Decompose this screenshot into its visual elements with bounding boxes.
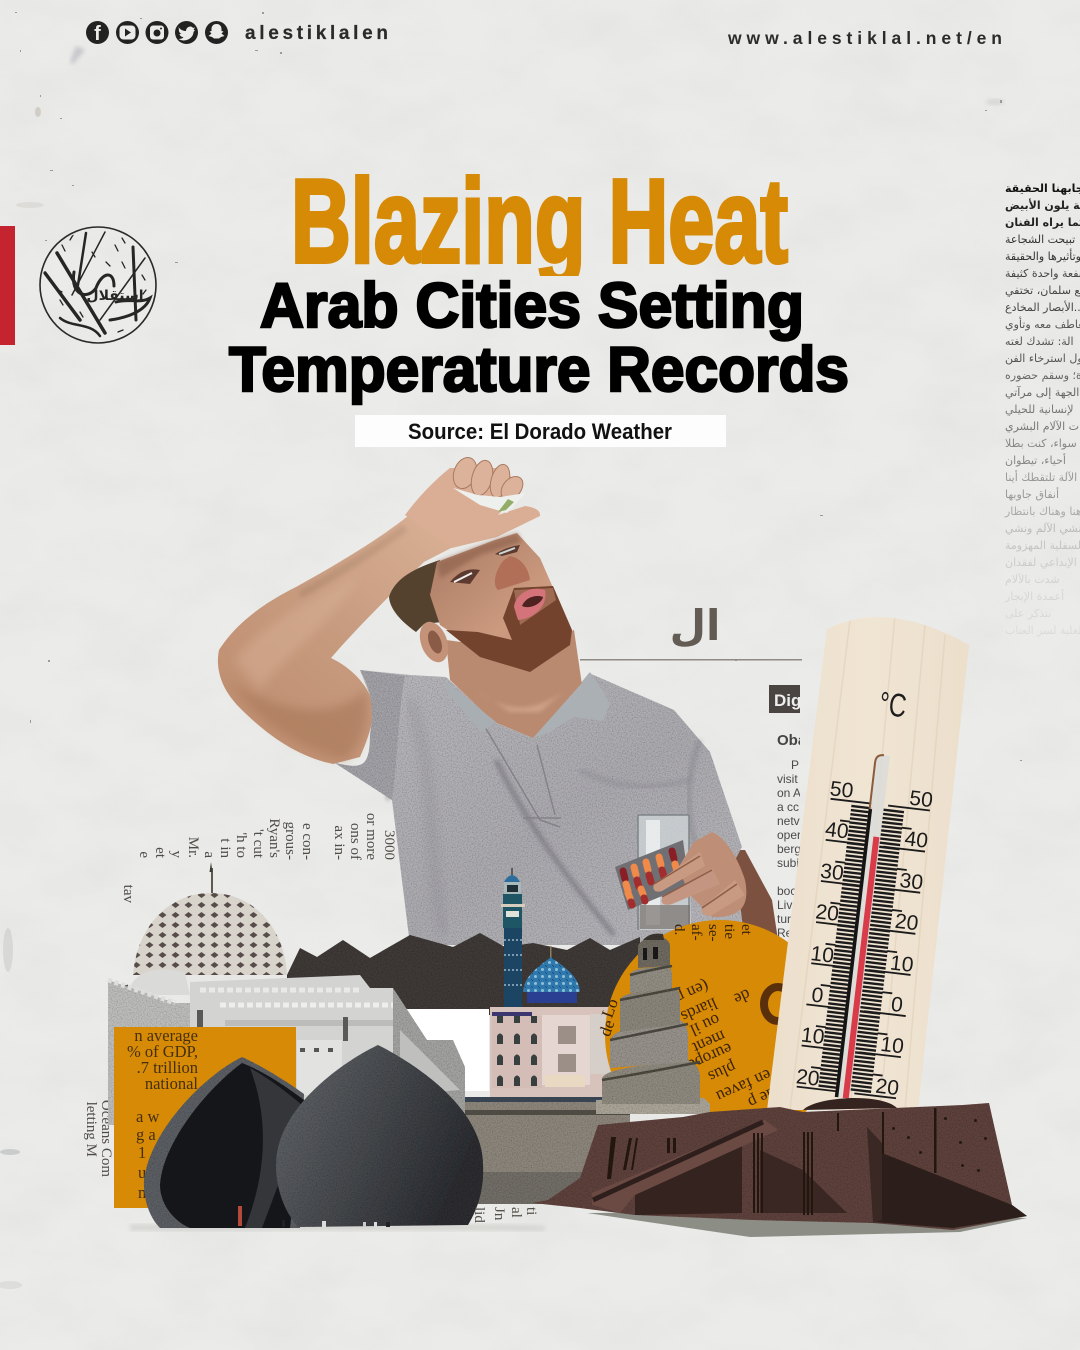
newsprint under monument — [471, 1207, 539, 1223]
orange circle with mirrored text: et — [738, 924, 754, 936]
cheek, nose — [495, 556, 530, 590]
heading: Arab Cities Setting: Arab Cities Setting — [260, 271, 804, 341]
newsprint under monument: al — [508, 1207, 524, 1218]
rotated newspaper text: or more — [363, 813, 379, 860]
newspaper clipping behind man and thermometer: Oba — [777, 732, 807, 749]
red accent bar — [0, 226, 15, 345]
orange clipping: % of GDP, — [127, 1042, 198, 1061]
hair — [389, 560, 442, 632]
title block — [229, 155, 849, 405]
icon: facebook: f — [94, 23, 101, 45]
right dome — [276, 1045, 483, 1227]
Malwiya spiral minaret — [596, 934, 710, 1114]
pill blister pack — [615, 840, 689, 910]
lattice dome — [133, 893, 287, 975]
heading: Temperature Records: Temperature Records — [229, 335, 849, 405]
rotated newspaper text: 'h to — [233, 832, 249, 858]
orange clipping: n average — [134, 1026, 198, 1045]
newspaper clipping behind man and thermometer: tur — [777, 912, 791, 926]
orange circle with mirrored text: af- — [688, 924, 704, 941]
skyline: white cut-out — [407, 1009, 489, 1091]
Arabic newspaper column: تبيحت الشجاعة — [1005, 233, 1075, 246]
ten-degree rules — [817, 800, 852, 1095]
newspaper clipping behind man and thermometer: subi — [777, 856, 799, 870]
skyline: blue-tiled minaret — [501, 868, 525, 1008]
shirt folds — [384, 676, 705, 935]
newspaper clipping behind man and thermometer: Dig — [774, 691, 801, 710]
left half dome — [144, 1057, 304, 1228]
newsprint under monument: ti — [523, 1207, 539, 1215]
icon: instagram — [146, 21, 168, 44]
ziggurat of Ur — [533, 1098, 1027, 1237]
left scale numbers: 10 — [800, 1024, 826, 1049]
left scale numbers: 0 — [810, 984, 825, 1008]
orange circle with mirrored text: ment — [690, 1026, 729, 1058]
Arabic newspaper column: هنا وهناك بانتظار — [1004, 505, 1080, 518]
left scale numbers: 20 — [795, 1065, 821, 1091]
newspaper clipping behind man and thermometer: P — [791, 758, 799, 772]
source label — [355, 415, 726, 447]
orange circle with mirrored text: se- — [705, 924, 721, 942]
Arabic newspaper column — [1004, 182, 1080, 637]
right scale numbers: 10 — [889, 951, 915, 977]
orange circle with mirrored text: tie — [721, 924, 737, 939]
right scale numbers: 40 — [903, 827, 929, 853]
beard — [446, 586, 572, 672]
orange clipping: .7 trillion — [137, 1058, 198, 1077]
Arabic newspaper column: ة؛ وسقم حضوره — [1005, 369, 1080, 382]
orange circle with mirrored text: europe — [685, 1039, 735, 1075]
orange clipping — [114, 1026, 296, 1208]
wooden thermometer — [767, 615, 969, 1110]
orange circle with mirrored text: liards — [678, 994, 720, 1026]
left scale numbers: 40 — [824, 818, 850, 844]
celsius symbol: °C — [877, 684, 909, 724]
newspaper clipping behind man and thermometer: netv — [777, 814, 800, 828]
red mercury column — [843, 837, 879, 1098]
hand holding blister — [653, 832, 746, 917]
website url: www.alestiklal.net/en — [727, 28, 1002, 48]
orange circle with mirrored text — [600, 920, 807, 1112]
source label: Source: El Dorado Weather — [408, 419, 672, 444]
orange circle with mirrored text: Lo — [598, 996, 622, 1020]
raised arm — [218, 505, 500, 764]
orange circle with mirrored text: se en faveu — [713, 1058, 791, 1106]
Arabic newspaper column: شدت بالآلام — [1005, 573, 1060, 586]
skyline: mountains — [287, 933, 640, 1015]
right scale numbers: 50 — [908, 787, 934, 812]
grand mosque — [108, 862, 465, 1125]
Arabic newspaper column: الجهة إلى مرآتي — [1005, 385, 1079, 399]
icon: twitter — [175, 21, 198, 44]
shadowed faces — [635, 1138, 742, 1215]
rotated newspaper text: Ryan's — [266, 818, 282, 858]
orange clipping: g a — [136, 1125, 156, 1144]
Arabic newspaper column: الة: تشدك لغته — [1005, 335, 1074, 348]
rotated newspaper text: grous- — [282, 822, 298, 860]
rotated newspaper text: Mr. — [185, 837, 201, 858]
Arabic newspaper column: سواء، كنت بطلا — [1005, 437, 1077, 450]
newspaper clipping behind man and thermometer: Re — [777, 926, 793, 940]
newsprint under monument: lid — [471, 1207, 487, 1223]
Arabic newspaper column: الأبصار المخادع.. — [1005, 300, 1080, 314]
newspaper clipping behind man and thermometer: Liv — [777, 898, 792, 912]
five-degree ticks — [814, 820, 845, 1087]
orange circle with mirrored text: ou il — [687, 1010, 723, 1040]
logo: calligraphic seal — [40, 227, 156, 343]
logo: calligraphic seal: استقلال — [86, 288, 144, 304]
newspaper clipping behind man and thermometer: oper — [777, 828, 801, 842]
face — [430, 533, 572, 670]
orange clipping: national — [145, 1074, 198, 1093]
rotated newspaper text: e — [136, 851, 152, 858]
rotated newspaper text: t in — [217, 838, 233, 858]
rotated newspaper text — [83, 813, 397, 1177]
torn paper shadow — [130, 1224, 545, 1231]
newspaper clipping behind man and thermometer: a cc — [777, 800, 799, 814]
right scale numbers: 30 — [898, 869, 924, 895]
orange circle with mirrored text: plus — [705, 1058, 739, 1086]
glass of water — [638, 815, 691, 930]
icon: facebook — [86, 21, 109, 45]
icon: youtube — [116, 21, 139, 44]
Arabic newspaper column: الآلة تلتقطك أينا — [1005, 470, 1077, 484]
small dome — [131, 969, 190, 995]
Arabic newspaper column: الإبداعي لفقدان — [1005, 556, 1077, 569]
soil mound — [803, 1098, 897, 1110]
right scale numbers: 0 — [890, 993, 904, 1017]
scale — [794, 680, 945, 1104]
far forearm — [700, 850, 778, 940]
newspaper clipping behind man and thermometer: berg — [777, 842, 801, 856]
staircases — [592, 1120, 778, 1213]
orange clipping: 1 — [138, 1143, 146, 1162]
orange clipping: u — [138, 1163, 146, 1182]
walls — [108, 980, 218, 1125]
orange clipping: n — [138, 1183, 146, 1202]
rotated newspaper text: ons of — [347, 823, 363, 860]
crumpled tissue — [453, 488, 526, 513]
right scale numbers: 20 — [874, 1075, 900, 1100]
rotated newspaper text: Oceans Com — [98, 1100, 114, 1177]
rotated newspaper text: 't cut — [250, 829, 266, 859]
newspaper clipping behind man and thermometer: visit — [777, 772, 798, 786]
Arabic newspaper column: لإنسانية للحيلي — [1005, 403, 1074, 416]
left scale numbers: 30 — [819, 860, 845, 885]
Al-Shaheed monument: split domes — [130, 1045, 545, 1231]
masthead glyph: ال — [670, 601, 720, 650]
left scale numbers: 20 — [814, 900, 840, 926]
Arabic newspaper column: وتأثيرها والحقيقة — [1005, 248, 1080, 263]
left scale numbers: 10 — [809, 942, 835, 968]
man wiping his forehead — [218, 454, 778, 945]
icon: snapchat — [205, 21, 228, 44]
newsprint under monument: Jn — [491, 1207, 507, 1221]
orange circle with mirrored text: de — [595, 1017, 619, 1039]
left scale numbers — [795, 777, 855, 1091]
Arabic newspaper column: أنفاق جاوبها — [1005, 487, 1059, 501]
ear — [415, 618, 453, 666]
left scale numbers: 50 — [829, 777, 855, 803]
rotated newspaper text: a — [201, 851, 217, 858]
glass tube — [836, 754, 890, 1099]
orange circle with mirrored text: de — [731, 985, 753, 1009]
handle text: alestiklalen — [245, 23, 388, 44]
orange circle with mirrored text: d. — [671, 924, 687, 935]
rotated newspaper text: bli — [114, 984, 130, 1000]
heading: Blazing Heat: Blazing Heat — [291, 155, 788, 288]
wooden board — [767, 617, 969, 1110]
closed eyes — [450, 569, 480, 584]
newspaper clipping behind man and thermometer: on A — [777, 786, 801, 800]
orange clipping: a w — [136, 1107, 159, 1126]
right scale numbers: 20 — [894, 910, 920, 935]
open mouth — [514, 589, 546, 620]
minor ticks — [829, 806, 862, 1089]
right scale numbers: 10 — [879, 1033, 905, 1058]
fingers — [449, 454, 527, 504]
main mass — [533, 1103, 1027, 1230]
skyline: pink buildings — [465, 1007, 615, 1102]
newspaper clipping behind man and thermometer: boc — [777, 884, 796, 898]
collar — [444, 680, 496, 732]
Arabic newspaper column: أحياء، تيطوان — [1005, 453, 1066, 467]
pilaster grooves — [607, 1108, 936, 1215]
hand — [405, 468, 540, 548]
skyline: blue dome — [523, 946, 580, 1003]
orange circle with mirrored text: de p — [745, 1083, 779, 1113]
ground shadow — [587, 1212, 1027, 1237]
Arabic newspaper column: أعمدة الإيجار — [1004, 589, 1064, 603]
social icons row — [86, 21, 228, 45]
tiny visitors — [238, 1206, 390, 1227]
sleeve — [335, 670, 405, 800]
rotated newspaper text: letting M — [83, 1102, 99, 1157]
rotated newspaper text: 3000 — [381, 830, 397, 860]
newspaper clipping behind man and thermometer — [580, 601, 807, 940]
brick holes — [893, 1118, 986, 1171]
rotated newspaper text: e con- — [299, 823, 315, 860]
rotated newspaper text: tav — [120, 885, 136, 903]
rotated newspaper text: y — [168, 850, 184, 858]
Arabic newspaper column: نتذكر على — [1005, 607, 1051, 620]
orange circle with mirrored text: (en p — [673, 976, 712, 1008]
skyline: harbour wall and rubble — [465, 1102, 630, 1204]
rotated newspaper text: et — [152, 847, 168, 859]
shirt — [335, 670, 745, 945]
right scale numbers — [874, 787, 934, 1100]
neck — [446, 630, 582, 738]
rotated newspaper text: ax in- — [331, 825, 347, 860]
